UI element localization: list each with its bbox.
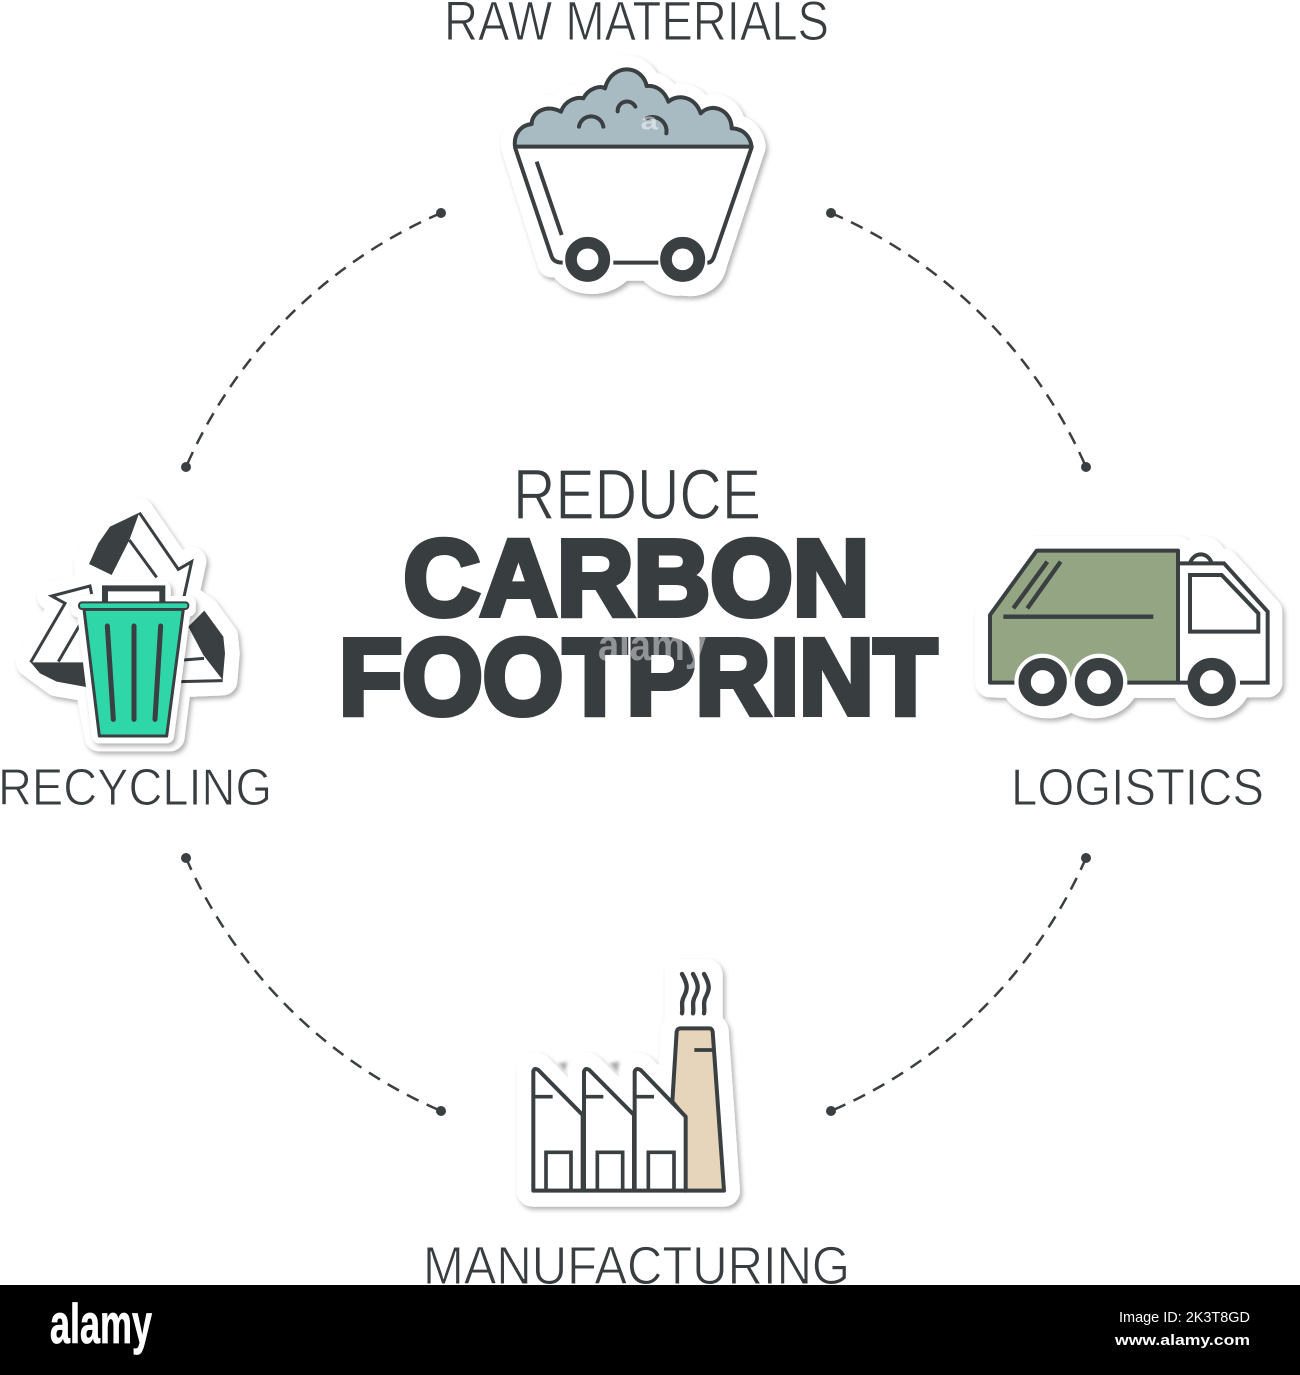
truck wheels bbox=[1014, 654, 1230, 710]
ore heap bbox=[515, 69, 752, 147]
bin handle bbox=[105, 588, 162, 604]
doors, ticks and ground bbox=[532, 1097, 725, 1191]
smoke bbox=[682, 974, 709, 1013]
truck window bbox=[1190, 575, 1258, 632]
title bbox=[339, 456, 937, 737]
arc endpoint dots bbox=[181, 208, 1091, 1116]
image id: Image ID: 2K3T8GD bbox=[1119, 1309, 1250, 1326]
footer bar bbox=[0, 1285, 1300, 1375]
truck cargo box bbox=[990, 551, 1178, 683]
icon: recycling bin bbox=[31, 513, 225, 737]
ore highlights bbox=[579, 102, 667, 133]
bin ribs bbox=[107, 626, 161, 719]
website: www.alamy.com bbox=[1114, 1332, 1250, 1349]
label: logistics: LOGISTICS bbox=[1011, 759, 1264, 817]
bin body bbox=[84, 609, 183, 736]
icon: garbage truck bbox=[990, 551, 1268, 710]
bin lid bbox=[79, 602, 188, 609]
alamy logo: alamy bbox=[50, 1292, 152, 1355]
notch shadows bbox=[558, 1061, 619, 1073]
cart wheels bbox=[571, 243, 699, 276]
title: REDUCE bbox=[513, 456, 761, 535]
cargo details bbox=[1003, 562, 1153, 617]
factory halls bbox=[533, 1069, 686, 1191]
label: recycling: RECYCLING bbox=[0, 759, 272, 817]
chimney bbox=[672, 1028, 724, 1191]
recycling arrow: top bbox=[89, 513, 139, 575]
cart body bbox=[515, 147, 752, 263]
recycling arrow: right bbox=[188, 611, 225, 680]
dashed cycle arcs bbox=[186, 213, 1086, 1111]
watermark over title: alamy bbox=[598, 621, 706, 670]
title: CARBON bbox=[404, 517, 870, 638]
truck cab bbox=[1178, 554, 1268, 683]
watermark on ore: a bbox=[641, 108, 659, 135]
label: manufacturing: MANUFACTURING bbox=[423, 1236, 850, 1296]
icon: mine cart bbox=[515, 69, 752, 282]
recycling arrow: left bbox=[31, 662, 88, 687]
title: FOOTPRINT bbox=[339, 616, 937, 737]
icon: factory bbox=[532, 974, 725, 1191]
